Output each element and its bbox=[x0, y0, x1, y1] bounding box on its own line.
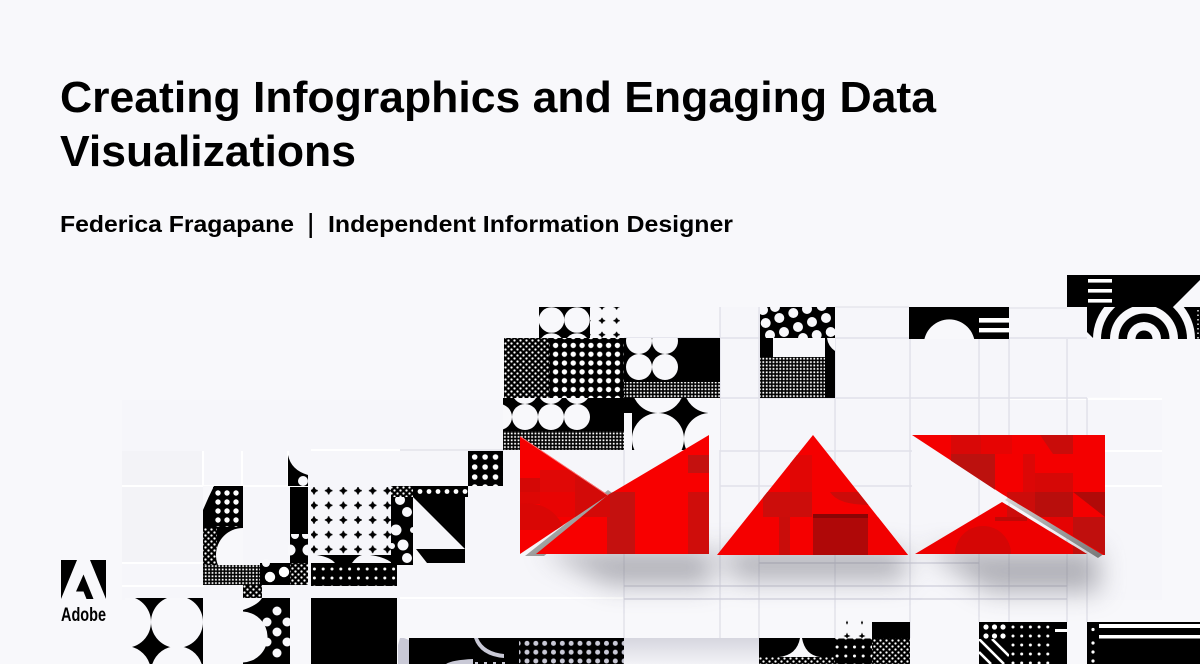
subtitle: presenter name and role bbox=[60, 211, 733, 238]
tile: small dots row bbox=[311, 563, 397, 586]
tile: row of circles with grid bbox=[503, 398, 624, 450]
tile: long stripes bbox=[1087, 622, 1200, 664]
Adobe wordmark: Adobe bbox=[61, 605, 106, 626]
tile: stars and small dots bbox=[835, 620, 910, 664]
panel: embossed tile grid bbox=[122, 307, 1162, 638]
tile: circles bbox=[539, 307, 590, 338]
tile: polka dots bbox=[760, 307, 835, 338]
panel: bottom pattern tiles bbox=[398, 620, 1200, 664]
shadow beneath MAX logo bbox=[540, 550, 1100, 592]
tile: half circle and stripes bbox=[909, 307, 1009, 339]
tile: big dots bbox=[549, 338, 624, 398]
icon: Adobe mark bbox=[61, 560, 106, 599]
tile: star field bbox=[311, 487, 393, 555]
tile: concentric target bbox=[1087, 307, 1200, 339]
title: Visualizations bbox=[60, 127, 356, 176]
tile: large circles bbox=[624, 398, 720, 450]
panel: top pattern tiles bbox=[503, 275, 1200, 450]
tile: dots with large circle bbox=[203, 486, 243, 565]
tile: stars bbox=[590, 307, 625, 338]
tile: bowl shape and dots bbox=[759, 638, 835, 664]
title bbox=[60, 73, 937, 176]
tile: stripes and corner triangle bbox=[1067, 275, 1200, 307]
tile: black with grid bbox=[760, 338, 835, 398]
tile: solid black block bbox=[311, 598, 397, 664]
tile: four circles with stars bbox=[132, 598, 203, 664]
tile: large circle and polka column bbox=[243, 598, 290, 664]
tile: lilac dots bbox=[519, 638, 624, 664]
letter X bbox=[912, 435, 1105, 558]
tile: triangle block bbox=[389, 486, 468, 565]
tile: black with circles bbox=[260, 559, 290, 585]
letter A bbox=[717, 435, 908, 555]
tile: lilac arcs on black bbox=[398, 638, 519, 664]
subtitle: presenter name and role: Federica Fragapane bbox=[60, 211, 294, 237]
title: Creating Infographics and Engaging Data bbox=[60, 73, 937, 122]
tile: small dot square bbox=[468, 451, 503, 486]
letter M bbox=[520, 435, 709, 556]
logo: Adobe bbox=[61, 560, 106, 626]
tile: circles with grid bbox=[624, 338, 720, 398]
tile: concave black shapes bbox=[317, 555, 392, 563]
tile: vertical black column bbox=[288, 455, 308, 585]
tile: lilac fade bbox=[624, 638, 759, 664]
tile: dots and diagonal stripes bbox=[979, 622, 1067, 664]
MAX logo bbox=[520, 435, 1105, 558]
subtitle: presenter name and role: Independent Information Designer bbox=[328, 211, 733, 237]
panel: left pattern tiles bbox=[99, 451, 503, 664]
tile: dense dots bbox=[504, 338, 549, 398]
tile: grid strip bbox=[203, 565, 260, 585]
tile: dense patch bbox=[243, 585, 262, 598]
